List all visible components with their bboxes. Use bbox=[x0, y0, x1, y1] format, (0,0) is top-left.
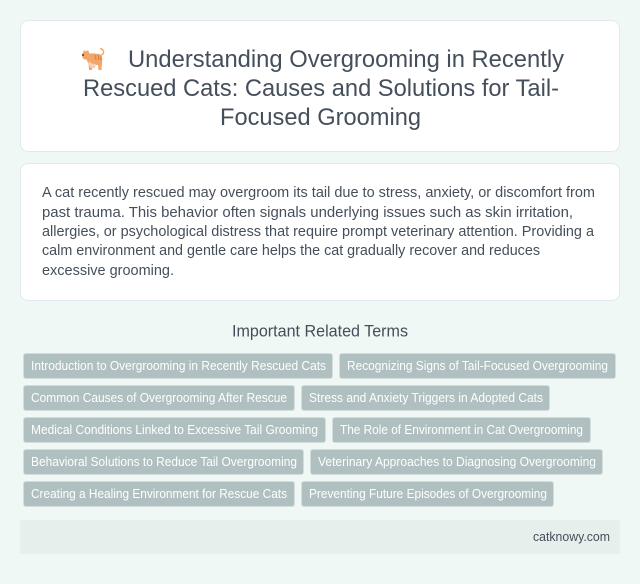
tag: Introduction to Overgrooming in Recently Rescued Cats bbox=[31, 359, 326, 373]
heading bbox=[83, 46, 564, 131]
heading: Rescued Cats: Causes and Solutions for Tail- bbox=[83, 75, 559, 102]
tag: Medical Conditions Linked to Excessive Tail Grooming bbox=[31, 423, 318, 437]
tag bbox=[301, 385, 550, 411]
tag: Stress and Anxiety Triggers in Adopted Cats bbox=[309, 391, 543, 405]
heading: related terms: Important Related Terms bbox=[232, 322, 408, 340]
tag bbox=[23, 353, 333, 379]
text block: description: excessive grooming. bbox=[42, 262, 174, 279]
panel: description bbox=[20, 163, 620, 301]
tag bbox=[310, 449, 603, 475]
tag: Preventing Future Episodes of Overgrooming bbox=[309, 487, 547, 501]
tag bbox=[332, 417, 591, 443]
panel: title card bbox=[20, 20, 620, 152]
tag: Recognizing Signs of Tail-Focused Overgrooming bbox=[347, 359, 608, 373]
footer text: catknowy.com bbox=[533, 530, 610, 544]
text block: description: past trauma. This behavior often signals underlying issues such as skin irritation, bbox=[42, 204, 573, 221]
tag: Behavioral Solutions to Reduce Tail Overgrooming bbox=[31, 455, 297, 469]
tag: Veterinary Approaches to Diagnosing Overgrooming bbox=[318, 455, 596, 469]
tag bbox=[23, 481, 295, 507]
tag bbox=[23, 417, 326, 443]
text block: description: A cat recently rescued may overgroom its tail due to stress, anxiety, or discomfort from bbox=[42, 184, 595, 201]
tag: Common Causes of Overgrooming After Rescue bbox=[31, 391, 287, 405]
tag: The Role of Environment in Cat Overgrooming bbox=[340, 423, 583, 437]
heading: Understanding Overgrooming in Recently bbox=[128, 46, 564, 73]
text block: description: allergies, or psychological distress that require prompt veterinary attention. Providing a bbox=[42, 223, 595, 240]
text block: description bbox=[42, 184, 595, 279]
tag bbox=[301, 481, 554, 507]
icon: cat bbox=[82, 48, 104, 70]
tag bbox=[23, 385, 295, 411]
tag: Creating a Healing Environment for Rescue Cats bbox=[31, 487, 287, 501]
tag bbox=[339, 353, 616, 379]
text block: description: calm environment and gentle care helps the cat gradually recover and reduces bbox=[42, 242, 540, 259]
tag group: related terms bbox=[23, 353, 616, 507]
heading: Focused Grooming bbox=[220, 104, 421, 131]
tag bbox=[23, 449, 304, 475]
footer bar bbox=[20, 520, 620, 554]
